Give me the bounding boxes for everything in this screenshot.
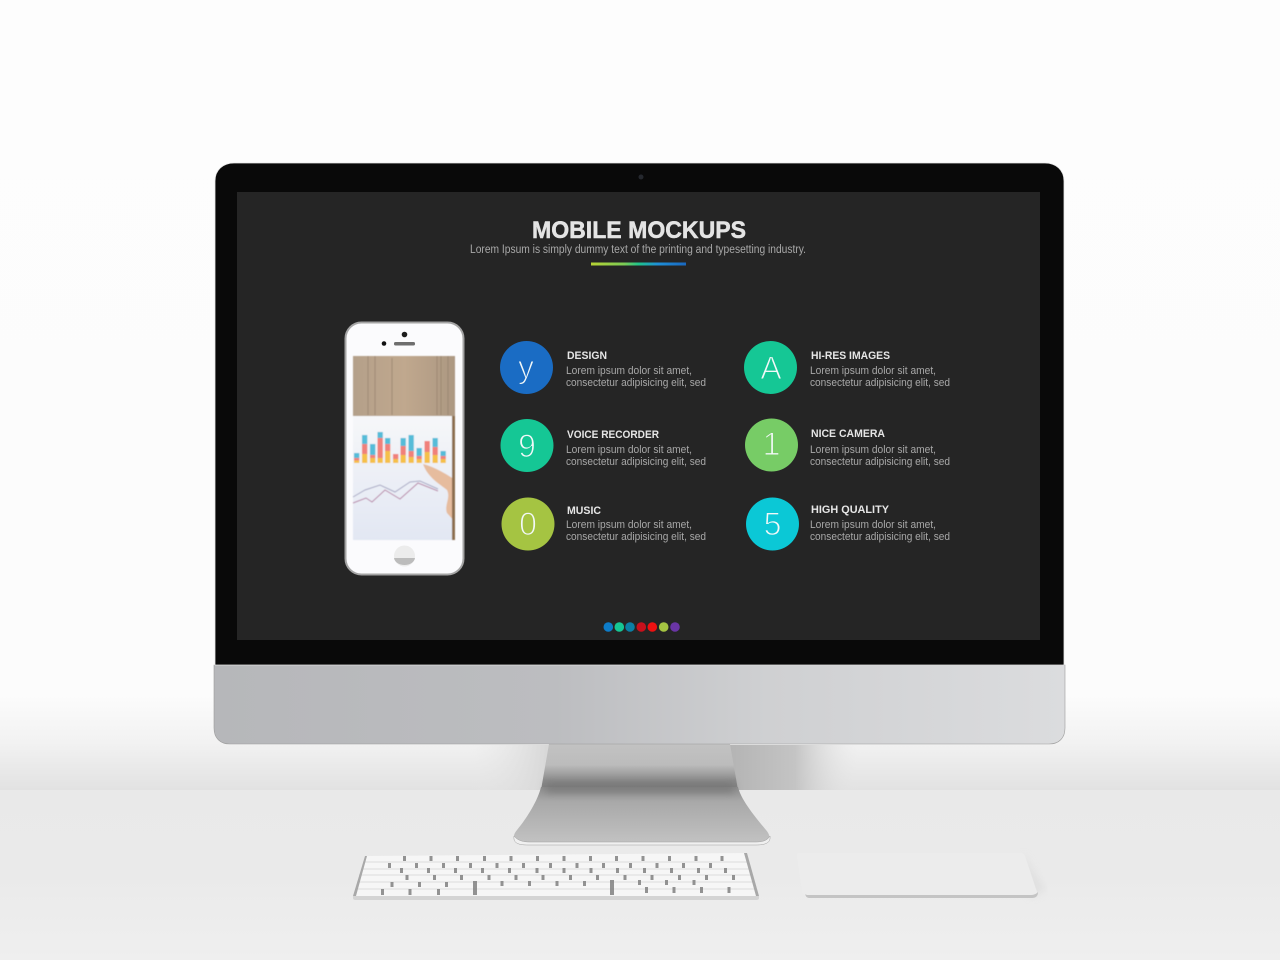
feature: music: consectetur adipisicing elit, sed xyxy=(566,531,706,543)
feature: hi-res images: consectetur adipisicing elit, sed xyxy=(810,377,950,389)
feature: voice recorder: Lorem ipsum dolor sit amet, xyxy=(566,444,692,456)
monitor xyxy=(214,163,1065,744)
feature: voice recorder: VOICE RECORDER xyxy=(567,429,659,441)
feature: high quality: consectetur adipisicing elit, sed xyxy=(810,531,950,543)
phone home button xyxy=(394,546,415,566)
feature: nice camera: NICE CAMERA xyxy=(811,428,885,440)
slide screen xyxy=(237,192,1040,640)
phone sensor xyxy=(382,341,386,346)
hand photo xyxy=(423,464,455,522)
bar chart photo xyxy=(354,432,446,463)
feature: music: Lorem ipsum dolor sit amet, xyxy=(566,519,692,531)
monitor bezel xyxy=(215,163,1064,665)
phone mockup xyxy=(346,322,464,574)
feature: design xyxy=(500,341,706,394)
feature: hi-res images xyxy=(744,341,950,394)
feature: high quality: Lorem ipsum dolor sit amet, xyxy=(810,519,936,531)
wall shadow left of stand xyxy=(470,745,550,790)
feature: design: y xyxy=(518,349,534,385)
feature: nice camera: consectetur adipisicing elit, sed xyxy=(810,456,950,468)
feature: nice camera xyxy=(745,418,950,472)
wall shadow right of stand xyxy=(730,745,860,790)
title: MOBILE MOCKUPS xyxy=(532,217,746,244)
desk surface xyxy=(0,790,1280,960)
webcam xyxy=(638,174,644,180)
monitor chin xyxy=(214,665,1065,744)
trackpad xyxy=(797,853,1046,898)
feature: hi-res images: A xyxy=(760,350,782,386)
keyboard xyxy=(353,853,759,900)
feature: design: DESIGN xyxy=(567,350,607,362)
feature: hi-res images: HI-RES IMAGES xyxy=(811,350,890,362)
feature: high quality xyxy=(746,498,950,550)
feature: voice recorder xyxy=(500,419,706,472)
feature: music: MUSIC xyxy=(567,505,601,517)
monitor stand xyxy=(514,744,770,845)
pagination dots xyxy=(604,622,680,632)
feature: nice camera: Lorem ipsum dolor sit amet, xyxy=(810,444,936,456)
keyboard key gaps xyxy=(381,856,735,895)
phone speaker xyxy=(394,342,415,346)
feature: high quality: 5 xyxy=(764,506,781,542)
line chart photo xyxy=(353,481,438,503)
subtitle: Lorem Ipsum is simply dummy text of the printing and typesetting industry. xyxy=(470,244,806,256)
gradient divider xyxy=(591,262,686,266)
feature: hi-res images: Lorem ipsum dolor sit amet, xyxy=(810,365,936,377)
feature: design: consectetur adipisicing elit, sed xyxy=(566,377,706,389)
feature: voice recorder: consectetur adipisicing elit, sed xyxy=(566,456,706,468)
phone body xyxy=(346,322,464,574)
feature: high quality: HIGH QUALITY xyxy=(811,504,890,516)
phone photo xyxy=(353,356,455,540)
feature: voice recorder: 9 xyxy=(518,428,536,464)
feature: design: Lorem ipsum dolor sit amet, xyxy=(566,365,692,377)
feature: music: 0 xyxy=(519,506,537,542)
phone camera xyxy=(402,332,407,337)
feature: music xyxy=(502,498,706,550)
feature: nice camera: 1 xyxy=(763,426,780,462)
